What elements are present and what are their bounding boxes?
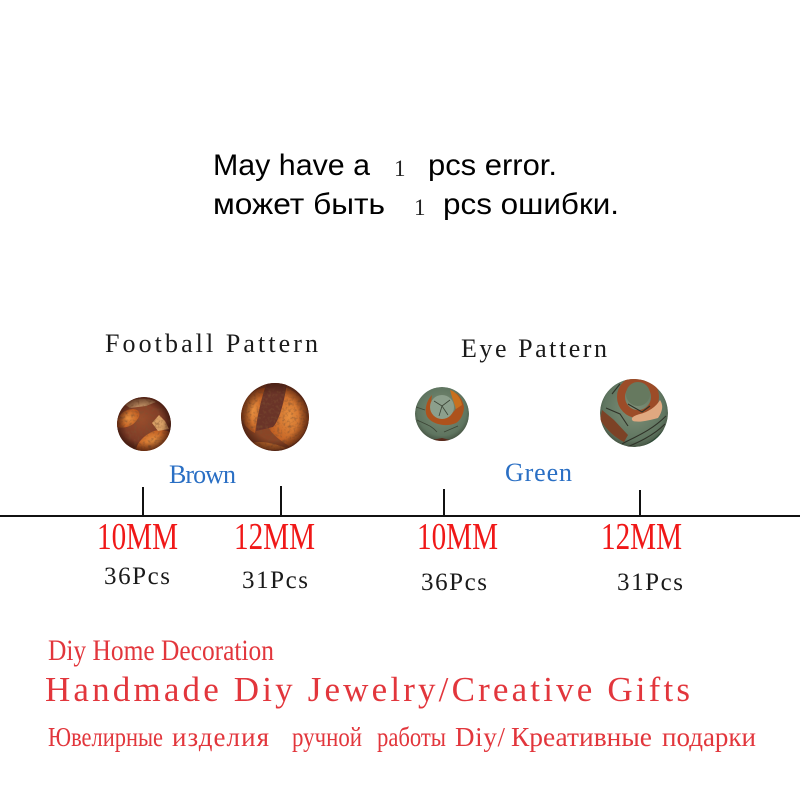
- count: 36Pcs: 36Pcs: [104, 563, 170, 590]
- notice line: English: pcs error.: [428, 149, 557, 182]
- label: Brown: Brown: [169, 460, 236, 489]
- caption: Handmade Diy Jewelry/Creative Gifts: Handmade Diy Jewelry/Creative Gifts: [45, 670, 690, 709]
- notice line: Russian: 1: [414, 195, 426, 220]
- caption: Russian: Ювелирные: [48, 722, 163, 752]
- caption: Russian: Креативные: [511, 722, 652, 752]
- notice line: Russian: [213, 188, 619, 221]
- caption: Russian: работы: [377, 722, 446, 752]
- size label: 10MM: 10MM: [417, 516, 498, 558]
- caption: Russian: Diy/: [455, 722, 505, 752]
- size label: 10MM: 10MM: [97, 516, 178, 558]
- count: 31Pcs: 31Pcs: [617, 569, 683, 596]
- size label: 12MM: 12MM: [234, 516, 315, 558]
- caption: Russian: ручной: [292, 722, 362, 752]
- count: 31Pcs: 31Pcs: [242, 567, 308, 594]
- notice line: English: 1: [394, 156, 406, 181]
- count: 36Pcs: 36Pcs: [421, 569, 487, 596]
- caption: Russian: [48, 722, 756, 752]
- bead: eye pattern 12mm: [600, 379, 669, 450]
- bead: football pattern 10mm: [117, 397, 171, 452]
- heading: Eye Pattern: Eye Pattern: [461, 334, 607, 363]
- caption: Russian: изделия: [172, 722, 269, 752]
- notice: error tolerance: [213, 149, 619, 221]
- bead: eye pattern 10mm: [415, 387, 469, 442]
- notice line: Russian: может быть: [213, 188, 385, 221]
- notice line: English: [213, 149, 557, 182]
- notice line: English: May have a: [213, 149, 370, 182]
- label: Green: Green: [505, 458, 572, 487]
- caption: Russian: подарки: [662, 722, 756, 752]
- bead: football pattern 12mm: [241, 382, 309, 451]
- size label: 12MM: 12MM: [601, 516, 682, 558]
- size axis: [0, 486, 800, 517]
- caption: Diy Home Decoration: Diy Home Decoration: [48, 634, 274, 667]
- heading: Football Pattern: Football Pattern: [105, 329, 318, 358]
- notice line: Russian: pcs ошибки.: [443, 188, 619, 221]
